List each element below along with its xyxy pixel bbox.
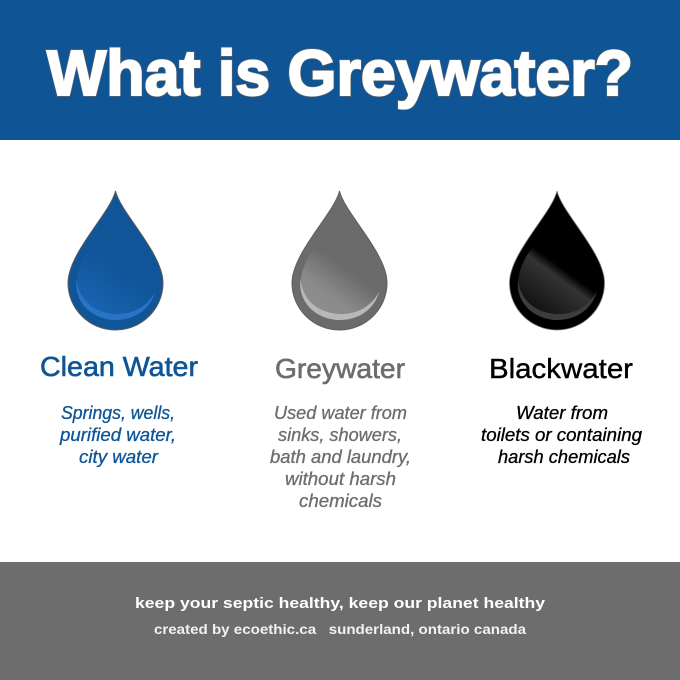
text: blackwater description: harsh chemicals bbox=[498, 447, 630, 467]
heading: clean water: Clean Water bbox=[40, 351, 198, 382]
text: greywater description: chemicals bbox=[299, 491, 382, 511]
panel: greywater bbox=[270, 191, 411, 511]
text: greywater description: bath and laundry, bbox=[270, 447, 411, 467]
icon: blue water drop bbox=[68, 191, 163, 330]
icon: grey water drop bbox=[292, 191, 387, 330]
text: greywater description: Used water from bbox=[274, 403, 407, 423]
title: What is Greywater? bbox=[47, 37, 633, 109]
panel: blackwater bbox=[481, 191, 642, 467]
text: clean water description: city water bbox=[79, 447, 159, 467]
heading: blackwater: Blackwater bbox=[489, 353, 633, 384]
text: clean water description: purified water, bbox=[59, 425, 176, 445]
text: blackwater description bbox=[481, 403, 642, 467]
text: greywater description: sinks, showers, bbox=[278, 425, 402, 445]
text: greywater description: without harsh bbox=[285, 469, 396, 489]
text: greywater description bbox=[270, 403, 411, 511]
text: clean water description: Springs, wells, bbox=[61, 403, 175, 423]
text: clean water description bbox=[59, 403, 176, 467]
panel: clean water bbox=[40, 191, 198, 467]
icon: black water drop bbox=[510, 191, 604, 330]
text: blackwater description: toilets or containing bbox=[481, 425, 642, 445]
footer tagline: keep your septic healthy, keep our planet healthy bbox=[135, 595, 546, 612]
text: blackwater description: Water from bbox=[516, 403, 608, 423]
title: What is Greywater? bbox=[47, 37, 633, 109]
header banner bbox=[0, 0, 680, 140]
footer credit: created by ecoethic.ca sunderland, ontario canada bbox=[154, 621, 526, 637]
footer band bbox=[0, 562, 680, 680]
heading: greywater: Greywater bbox=[275, 353, 405, 384]
